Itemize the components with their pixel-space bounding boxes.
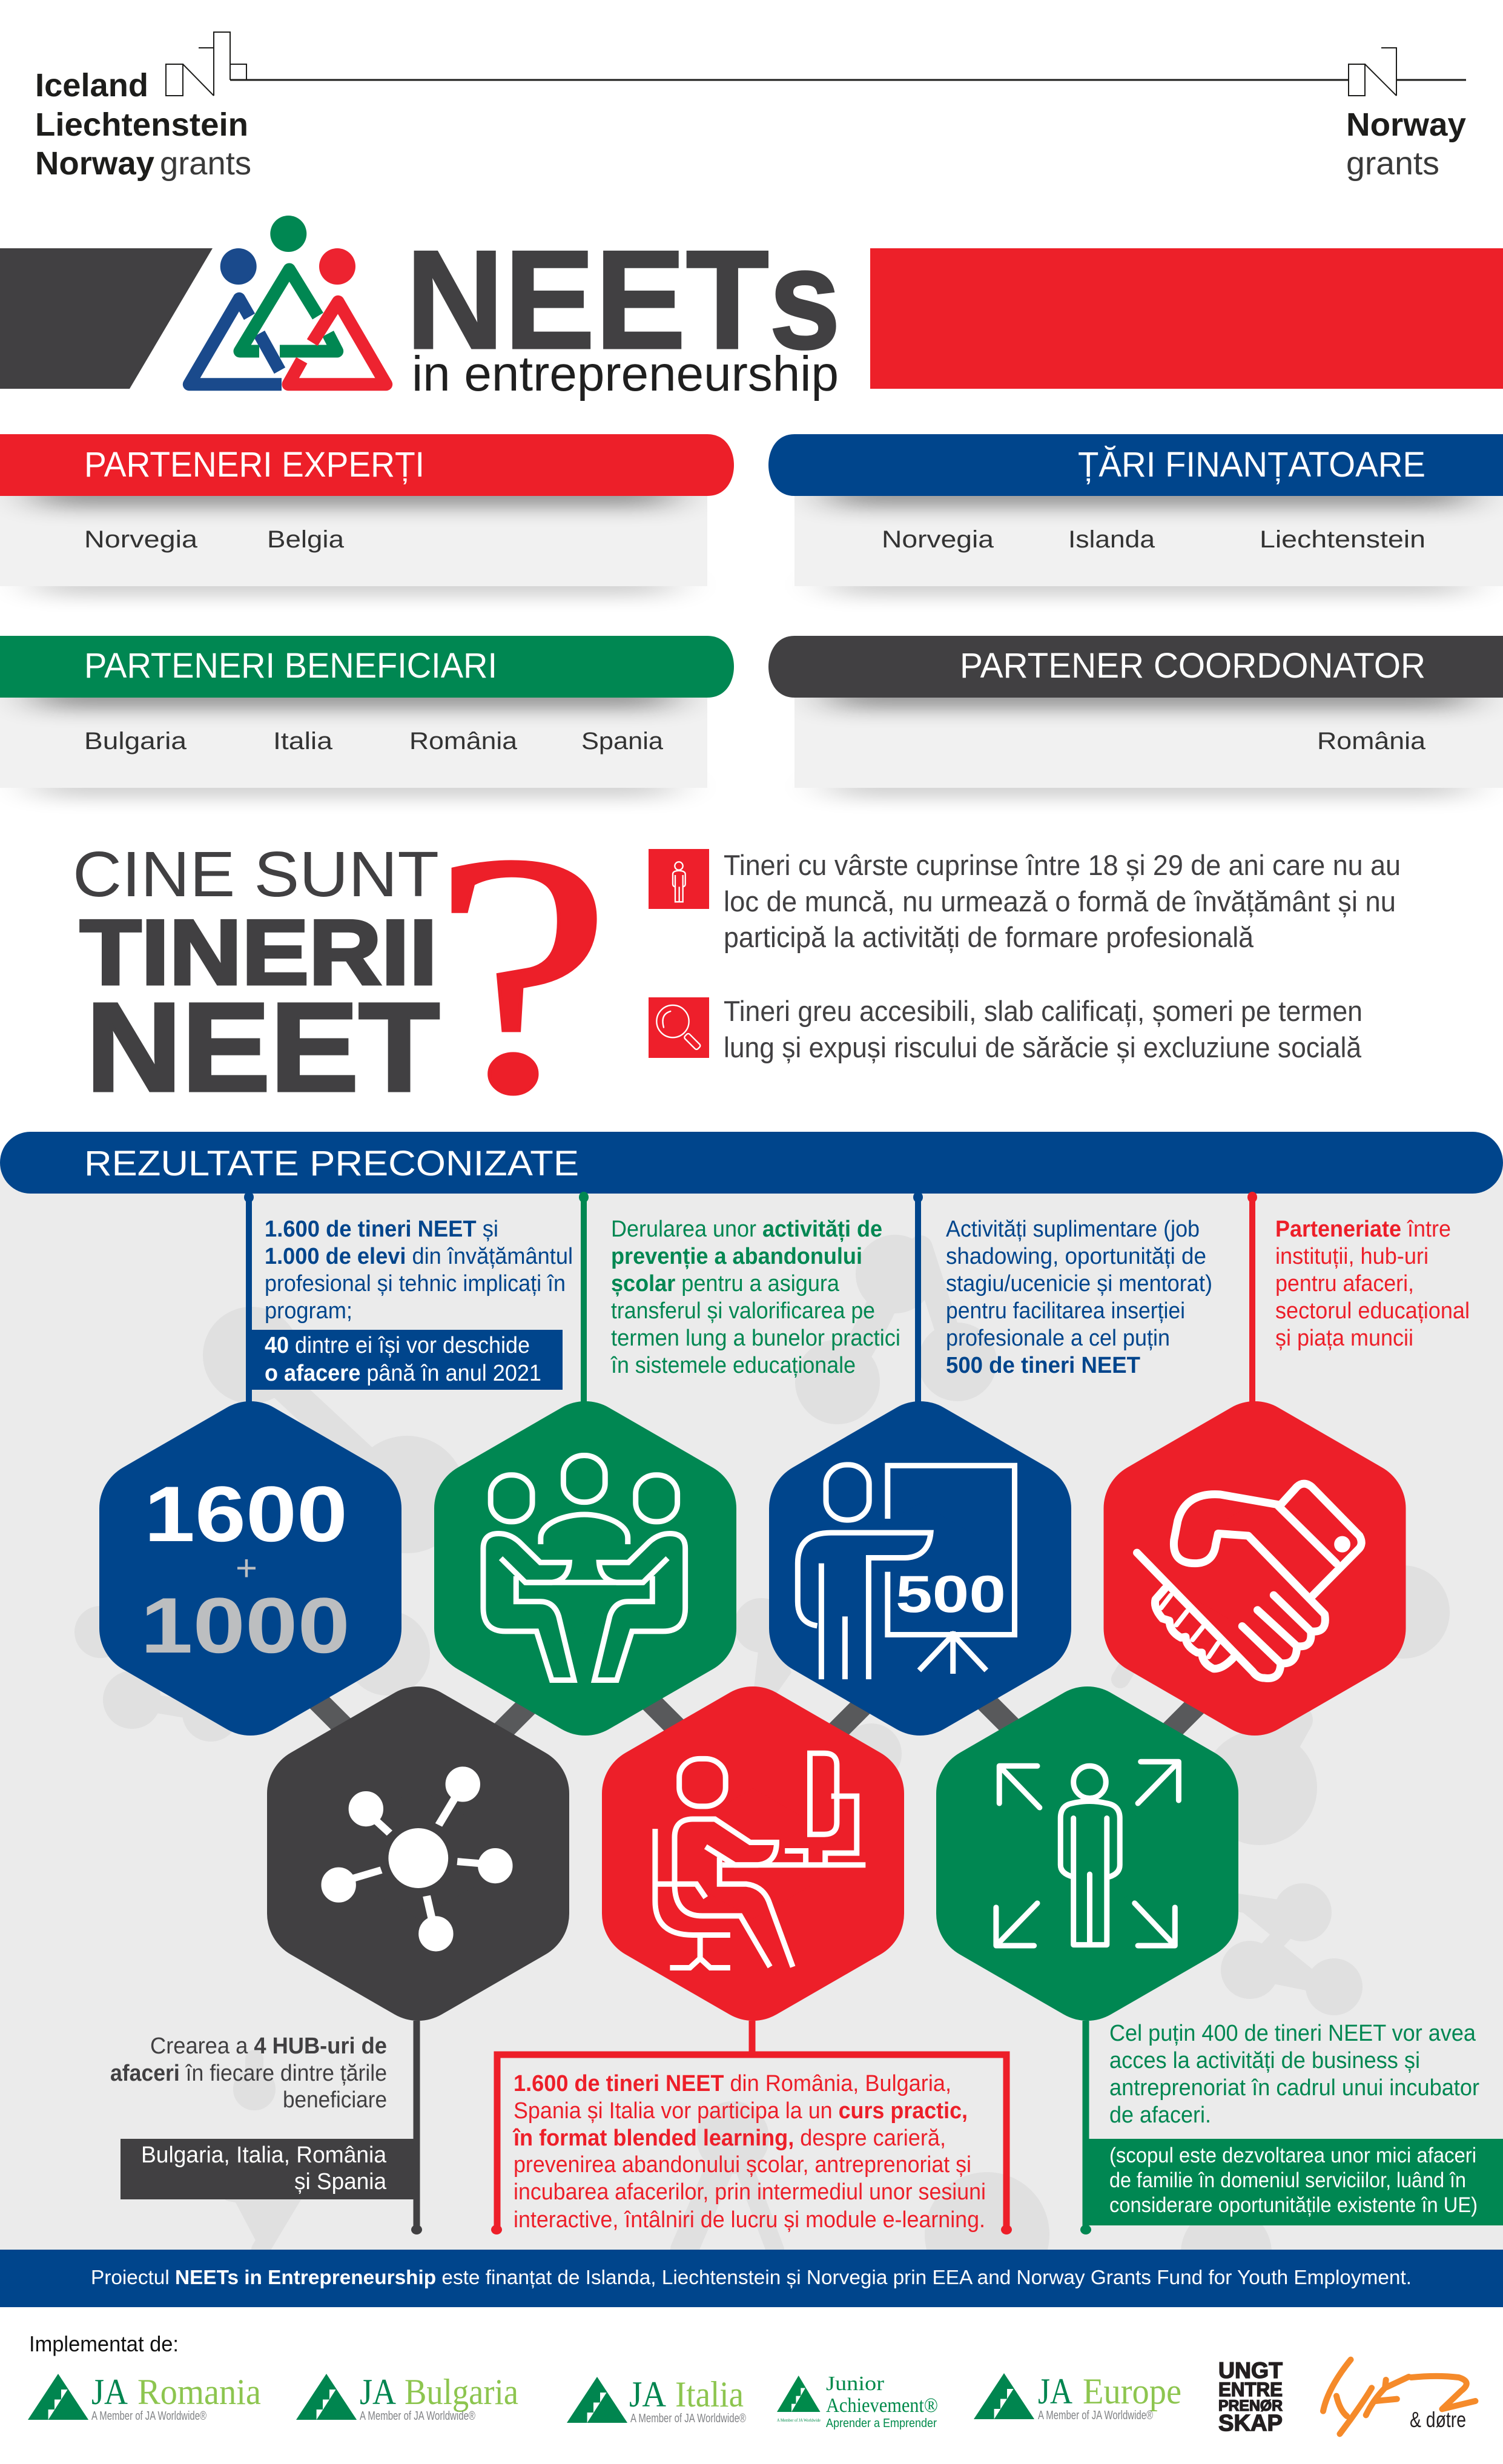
logo: JA Italia: A Member of JA Worldwide® [630,2412,746,2425]
bottom stem: incubator [1080,2021,1091,2234]
logo: Iceland Liechtenstein Norway grants: Iceland [35,67,148,104]
callout: result 1: 40 dintre ei își vor deschide [265,1333,530,1358]
panel: tari finantatoare: Norvegia [882,526,994,553]
callout: hub countries [121,2139,414,2199]
frame: course result [491,2021,1012,2234]
callout: result 1: o afacere până în anul 2021 [265,1361,541,1386]
logo: Ungt Entreprenørskap: ENTRE [1218,2379,1283,2400]
hexagon: 1600 + 1000: 1000 [140,1581,350,1670]
panel: parteneri experti: Belgia [267,526,345,553]
logo: JA Romania: Romania [137,2372,261,2412]
logo: Iceland Liechtenstein Norway grants [35,32,251,182]
panel: partener coordonator [740,636,1503,793]
heading bar: rezultate preconizate [0,1132,1503,1194]
logo: JA Italia: JA [629,2374,666,2414]
text: incubator result: antreprenoriat în cadrul unui incubator [1109,2075,1479,2101]
text: course result: incubarea afacerilor, prin intermediul unor sesiuni [514,2179,986,2205]
heading: cine sunt tinerii NEET: CINE SUNT [73,839,439,910]
text: result 4: pentru afaceri, [1275,1271,1414,1296]
panel: tari finantatoare [740,434,1503,592]
logo: Ungt Entreprenørskap: SKAP [1218,2411,1283,2436]
text: result 3: shadowing, oportunități de [946,1244,1206,1269]
heading: cine sunt tinerii NEET: TINERII [80,901,437,1004]
text: result 4: instituții, hub-uri [1275,1244,1429,1269]
logo: JA Europe: A Member of JA Worldwide® [1038,2409,1153,2422]
text: result 2: Derularea unor activități de [611,1217,882,1242]
text block: who are NEETs 1: Tineri cu vârste cuprinse între 18 și 29 de ani care nu au [724,849,1401,881]
text: result 4: și piața muncii [1275,1326,1413,1351]
logo: Lyk-z og dotre [1323,2360,1475,2434]
text: result 1 [265,1217,573,1324]
panel: parteneri beneficiari [0,636,762,793]
text: result 1: 1.600 de tineri NEET și [265,1217,498,1242]
logo: JA Italia: Italia [675,2374,744,2414]
panel: parteneri beneficiari: Italia [273,728,333,755]
hexagon: 1600 + 1000: 1600 [144,1470,348,1558]
logo: Ungt Entreprenørskap [1218,2358,1283,2436]
text block: who are NEETs 1 [724,849,1401,953]
banner: red block [870,248,1503,389]
connector bars between hexagons [312,1695,1201,1737]
text: result 3: pentru facilitarea inserției [946,1298,1185,1324]
panel: partener coordonator: PARTENER COORDONATOR [960,646,1425,685]
text: hub result [110,2033,387,2113]
text: result 2 [610,1217,900,1378]
logo: Junior Achievement: Achievement® [826,2394,938,2417]
hexagon: person at desk icon [649,1734,865,1974]
heading bar: rezultate preconizate: REZULTATE PRECONIZATE [84,1144,579,1183]
text block: who are NEETs 1: participă la activități de formare profesională [724,921,1254,953]
hexagon: meeting icon [481,1448,689,1688]
text: result 3: stagiu/ucenicie și mentorat) [946,1271,1212,1296]
text: result 3: 500 de tineri NEET [946,1353,1140,1378]
logo: Junior Achievement: A Member of JA Worldwide [777,2418,821,2423]
text: result 4: sectorul educațional [1275,1298,1470,1324]
logo: Iceland Liechtenstein Norway grants: Norway [35,145,154,182]
panel: parteneri experti: Norvegia [84,526,198,553]
text: hub result: beneficiare [283,2087,387,2113]
hexagon: handshake icon [1137,1448,1361,1688]
text block: who are NEETs 2: lung și expuși riscului de sărăcie și excluziune socială [724,1031,1362,1063]
callout: incubator scope: (scopul este dezvoltarea unor mici afaceri [1109,2144,1476,2167]
hexagon: person with arrows icon [983,1734,1191,1974]
text block: who are NEETs 1: loc de muncă, nu urmează o formă de învățământ și nu [724,885,1396,917]
panel: parteneri beneficiari: Bulgaria [84,728,187,755]
footer bar: funding statement [0,2250,1503,2307]
top stems [244,1192,1257,1405]
footer bar: funding statement: Proiectul NEETs in Entrepreneurship este finanțat de Islanda, Liechtenstein și Norvegia prin EEA and Norway Grants Fund for Youth Employment. [91,2266,1412,2288]
text: incubator result [1109,2021,1479,2128]
bottom stem: hub [411,2021,422,2234]
logo: JA Bulgaria [296,2372,518,2423]
text: result 2: prevenție a abandonului [611,1244,862,1269]
hexagon: presenter 500 icon: 500 [896,1565,1006,1623]
panel: partener coordonator: România [1317,728,1426,755]
logo: JA Bulgaria: JA [360,2372,396,2412]
text: result 1: 1.000 de elevi din învățământul [265,1244,573,1269]
logo: Ungt Entreprenørskap: UNGT [1218,2358,1283,2383]
project logo: three interlaced triangles [189,216,386,385]
text: hub result: Crearea a 4 HUB-uri de [150,2033,387,2059]
background molecule shapes [84,1244,1441,2289]
logo: JA Europe [974,2371,1181,2422]
logo: JA Romania: JA [91,2372,128,2412]
text: course result: Spania și Italia vor participa la un curs practic, [514,2098,968,2124]
text: result 2: transferul și valorificarea pe [611,1298,875,1324]
logo: Junior Achievement [777,2373,938,2430]
panel: tari finantatoare: Liechtenstein [1260,526,1425,553]
callout: incubator scope: de familie în domeniul serviciilor, luând în [1109,2168,1466,2192]
text: incubator result: acces la activități de business și [1109,2048,1420,2073]
text: result 3: profesionale a cel puțin [946,1326,1170,1351]
text: incubator result: Cel puțin 400 de tineri NEET vor avea [1109,2021,1476,2046]
text: course result: 1.600 de tineri NEET din România, Bulgaria, [514,2071,951,2096]
text: incubator result: de afaceri. [1109,2102,1211,2128]
logo: Iceland Liechtenstein Norway grants: grants [160,145,251,182]
callout: hub countries: și Spania [294,2169,387,2195]
logo: JA Italia [567,2374,746,2425]
hexagon: network hub icon [314,1734,522,1974]
panel: parteneri beneficiari: Spania [581,728,664,755]
hexagon: 1600 + 1000 [140,1448,354,1688]
text: result 4 [1275,1217,1470,1351]
title: NEETs: s [769,219,841,379]
callout: incubator scope [1083,2139,1503,2225]
text: result 2: în sistemele educaționale [610,1353,856,1378]
logo: Lyk-z og dotre: & døtre [1410,2407,1466,2432]
heading: cine sunt tinerii NEET: NEET [86,977,440,1118]
text block: who are NEETs 2 [724,995,1363,1063]
text: course result [512,2071,986,2233]
panel: grey results background [0,1163,1503,2250]
callout: incubator scope: considerare oportunitățile existente în UE) [1109,2193,1478,2217]
logo: JA Europe: Europe [1083,2371,1181,2411]
panel: tari finantatoare: ȚĂRI FINANȚATOARE [1078,445,1425,484]
text: result 1: profesional și tehnic implicați în [265,1271,566,1296]
heading: cine sunt tinerii NEET [73,839,440,1118]
hexagon: 1600 + 1000: + [236,1548,257,1588]
text: course result: în format blended learning, despre carieră, [512,2125,946,2151]
hexagon: presenter 500 icon [798,1448,1024,1688]
text: result 3: Activități suplimentare (job [946,1217,1200,1242]
subtitle: in entrepreneurship: in entrepreneurship [412,346,839,401]
text: hub result: afaceri în fiecare dintre țările [110,2061,387,2086]
banner: grey wedge [0,248,213,389]
callout: result 1 [249,1330,563,1390]
logo: Norway grants: grants [1346,145,1439,182]
callout: hub countries: Bulgaria, Italia, România [141,2142,387,2168]
logo: JA Bulgaria: Bulgaria [405,2372,518,2412]
logo: Junior Achievement: Junior [826,2373,885,2395]
logo: Norway grants [1346,48,1466,182]
text: result 2: termen lung a bunelor practici [611,1326,900,1351]
text: result 4: Parteneriate între [1275,1217,1451,1242]
label: implementat de: Implementat de: [29,2331,179,2356]
logo: Iceland Liechtenstein Norway grants: Liechtenstein [35,107,248,143]
logo: JA Europe: JA [1038,2371,1072,2411]
logo: Ungt Entreprenørskap: PRENØR [1218,2397,1283,2414]
text: result 3 [946,1217,1212,1378]
text: result 1: program; [265,1298,352,1324]
text: result 2: școlar pentru a asigura [611,1271,840,1296]
logo: Junior Achievement: Aprender a Emprender [826,2417,937,2430]
icon: magnifier on red square [649,997,709,1058]
top rule line [230,79,1466,81]
text: course result: interactive, întâlniri de lucru și module e-learning. [514,2207,985,2233]
logo: JA Romania [28,2372,261,2423]
panel: parteneri beneficiari: PARTENERI BENEFICIARI [84,646,497,685]
logo: JA Romania: A Member of JA Worldwide® [91,2410,206,2423]
big question mark: ? [432,783,612,1164]
panel: parteneri experti [0,434,762,592]
title: NEETs: NEET [406,222,769,378]
panel: parteneri experti: PARTENERI EXPERȚI [84,445,424,484]
icon: person on red square [649,849,709,909]
logo: Norway grants: Norway [1346,107,1466,143]
panel: tari finantatoare: Islanda [1068,526,1155,553]
text block: who are NEETs 2: Tineri greu accesibili, slab calificați, șomeri pe termen [724,995,1363,1027]
panel: parteneri beneficiari: România [409,728,518,755]
logo: JA Bulgaria: A Member of JA Worldwide® [360,2410,475,2423]
text: course result: prevenirea abandonului școlar, antreprenoriat și [514,2152,971,2178]
